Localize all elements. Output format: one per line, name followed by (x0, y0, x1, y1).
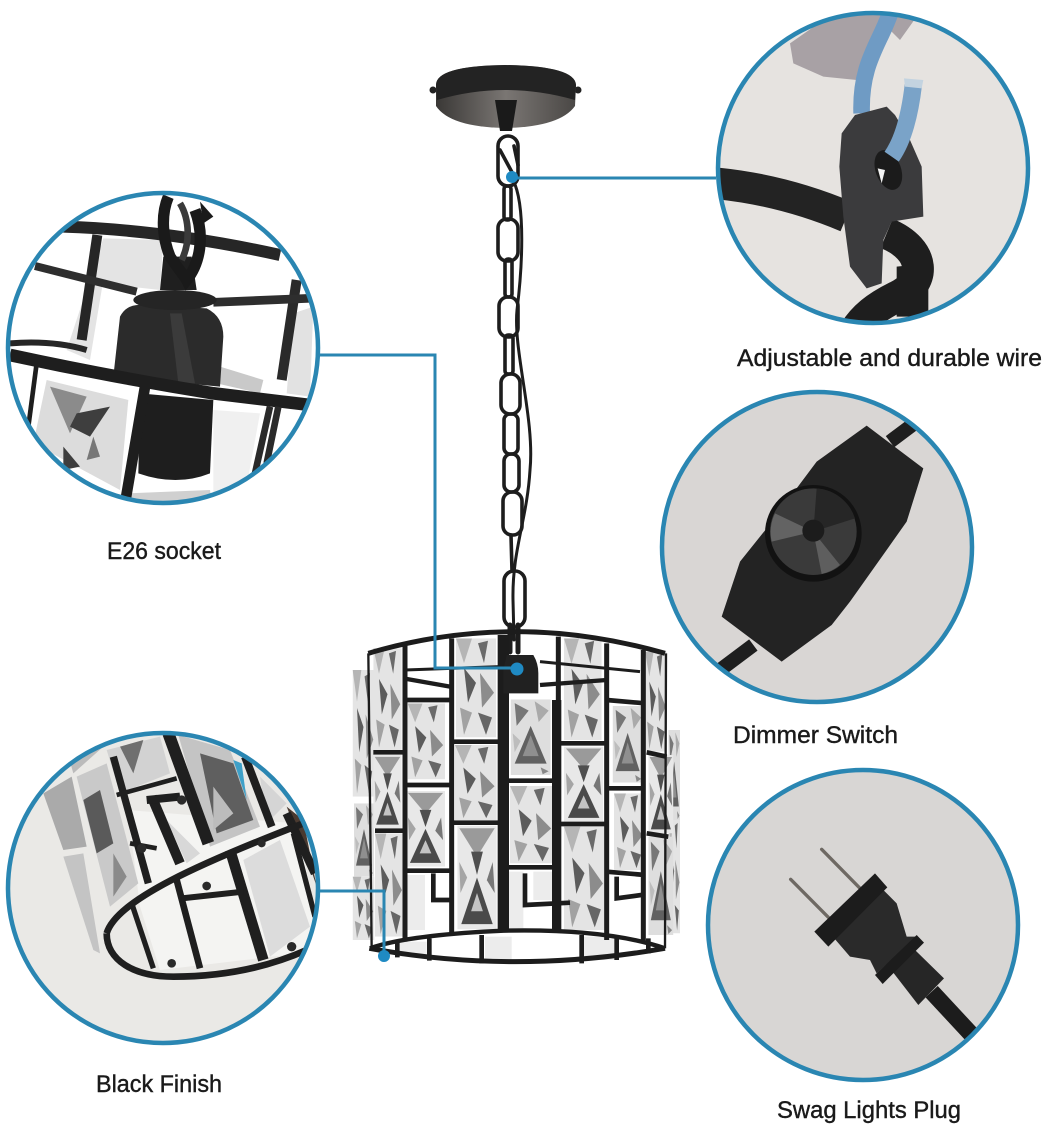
frame bars (107, 733, 315, 977)
crystal (33, 380, 128, 490)
panel: black finish close-up (8, 733, 318, 1043)
black wire (717, 183, 847, 217)
label: Dimmer Switch: Dimmer Switch (733, 722, 898, 749)
chain links (163, 197, 200, 280)
panel: E26 socket close-up (8, 193, 318, 513)
chain and wire (498, 136, 531, 652)
lower panels (400, 872, 615, 960)
plastic clip (839, 107, 923, 288)
label: Swag Lights Plug: Swag Lights Plug (777, 1097, 961, 1124)
leader line: finish callout (320, 891, 390, 962)
label: Adjustable and durable wire: Adjustable and durable wire (737, 345, 1042, 372)
rim (107, 823, 303, 933)
blue hook (862, 13, 890, 113)
label: E26 socket: E26 socket (107, 538, 221, 565)
crystal cage shade (353, 632, 680, 963)
ceiling canopy (430, 65, 582, 131)
front ring and bars (10, 355, 310, 405)
pendant lamp (353, 65, 680, 963)
socket body (113, 305, 223, 387)
outer side crystals (353, 648, 680, 940)
panel: swag lights plug close-up (708, 770, 1018, 1080)
leader line: wire callout (506, 171, 716, 183)
crystals (43, 777, 87, 850)
leader line: socket callout (320, 355, 524, 676)
glove (790, 10, 917, 80)
main crystals (406, 638, 644, 930)
panel: dimmer switch close-up (662, 392, 972, 702)
socket (503, 655, 538, 693)
panel: adjustable wire close-up (717, 10, 1028, 333)
metal frame (368, 632, 668, 963)
label: Black Finish: Black Finish (96, 1071, 222, 1098)
cage panels (127, 810, 317, 970)
